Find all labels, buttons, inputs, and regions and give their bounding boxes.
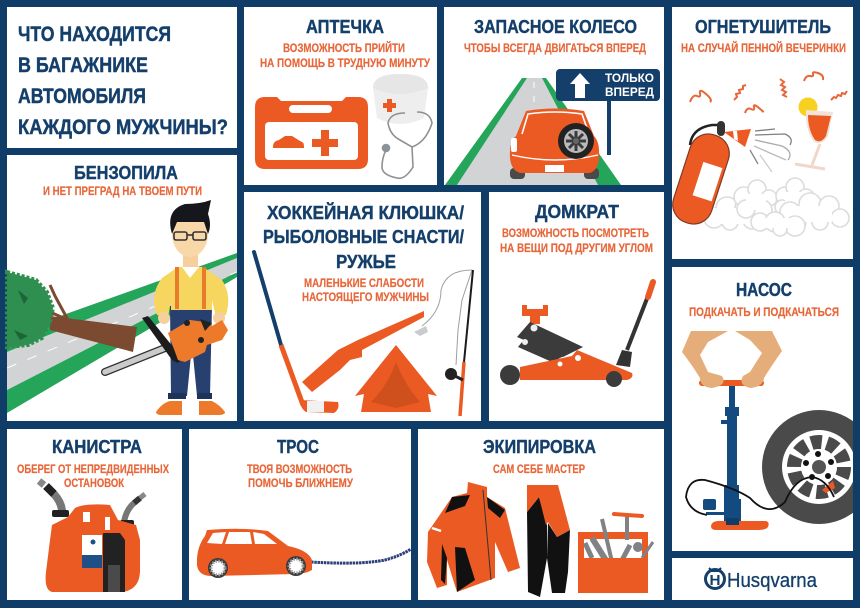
panel: logo [672, 558, 853, 600]
heading: gear: ЭКИПИРОВКА [483, 437, 596, 457]
logo: Husqvarna: H [710, 572, 720, 589]
panel: jack [489, 192, 664, 421]
subtitle: chainsaw: И НЕТ ПРЕГРАД НА ТВОЕМ ПУТИ [43, 184, 202, 198]
title: КАЖДОГО МУЖЧИНЫ? [18, 115, 228, 139]
icon: rifle [302, 311, 424, 392]
icon: car [197, 529, 312, 578]
icon: jacket [427, 482, 520, 592]
heading: hobbies: РЫБОЛОВНЫЕ СНАСТИ/ [263, 227, 464, 247]
icon: hands on pump [682, 331, 782, 388]
icon: car jack [500, 282, 653, 387]
icon: hockey stick [254, 252, 338, 413]
icon: trousers [527, 485, 570, 597]
panel: spare wheel [444, 7, 664, 185]
icon: cocktail [795, 98, 833, 169]
confetti [690, 72, 847, 113]
spray lines [750, 129, 791, 172]
hands [158, 312, 170, 324]
subtitle: tow rope: ПОМОЧЬ БЛИЖНЕМУ [248, 476, 353, 490]
subtitle: first aid kit: НА ПОМОЩЬ В ТРУДНУЮ МИНУТУ [260, 56, 430, 70]
heading: pump: НАСОС [736, 280, 792, 300]
shirt [154, 267, 228, 317]
heading: hobbies [263, 202, 464, 272]
logo: Husqvarna: Husqvarna [727, 570, 818, 592]
icon: canister [39, 481, 145, 592]
title [18, 22, 228, 139]
subtitle: jack: ВОЗМОЖНОСТЬ ПОСМОТРЕТЬ [502, 226, 649, 240]
icon: stethoscope [382, 112, 432, 178]
sign: only forward: ТОЛЬКО [605, 71, 654, 85]
icon: fire extinguisher [668, 121, 751, 229]
icon: rope [311, 549, 411, 563]
subtitle: jack: НА ВЕЩИ ПОД ДРУГИМ УГЛОМ [500, 241, 653, 255]
icon: fallen tree [7, 272, 137, 352]
panel: pump [672, 267, 860, 551]
subtitle: gear: САМ СЕБЕ МАСТЕР [493, 462, 585, 476]
subtitle: spare wheel: ЧТОБЫ ВСЕГДА ДВИГАТЬСЯ ВПЕРЕД [464, 41, 646, 55]
sign: only forward: ВПЕРЕД [605, 85, 654, 99]
subtitle: canister [17, 462, 169, 490]
title: ЧТО НАХОДИТСЯ [18, 22, 171, 46]
icon: wheel [762, 410, 860, 524]
panel: gear [418, 429, 664, 600]
chainsaw bar [105, 348, 165, 372]
panel: first aid kit [244, 7, 437, 185]
subtitle: tow rope [247, 462, 353, 490]
heading: jack: ДОМКРАТ [535, 202, 619, 222]
panel: fire extinguisher [668, 7, 853, 259]
icon: pump [686, 380, 834, 530]
subtitle: canister: ОБЕРЕГ ОТ НЕПРЕДВИДЕННЫХ [17, 462, 169, 476]
sign: only forward [556, 69, 660, 155]
panel: chainsaw [7, 155, 237, 421]
heading: tow rope: ТРОС [277, 437, 319, 457]
title: АВТОМОБИЛЯ [18, 84, 146, 108]
heading: first aid kit: АПТЕЧКА [306, 17, 384, 37]
heading: spare wheel: ЗАПАСНОЕ КОЛЕСО [474, 17, 637, 37]
heading: hobbies: РУЖЬЕ [336, 252, 396, 272]
heading: canister: КАНИСТРА [52, 437, 142, 457]
subtitle: first aid kit [260, 40, 430, 70]
road [7, 253, 237, 413]
icon: fishing rod [414, 270, 473, 416]
subtitle: jack [500, 226, 653, 255]
subtitle: hobbies: МАЛЕНЬКИЕ СЛАБОСТИ [304, 276, 424, 290]
panel: fuel canister [7, 429, 182, 600]
subtitle: tow rope: ТВОЯ ВОЗМОЖНОСТЬ [247, 462, 352, 476]
subtitle: canister: ОСТАНОВОК [64, 476, 125, 490]
road [445, 78, 621, 185]
legs [170, 306, 212, 396]
figure: man with chainsaw [105, 200, 228, 415]
heading: hobbies: ХОККЕЙНАЯ КЛЮШКА/ [267, 202, 464, 223]
panel: hockey stick, fishing tackle, rifle [244, 192, 481, 421]
panel: tow rope [189, 429, 411, 600]
icon: medical cap [373, 74, 428, 124]
foam clouds [704, 178, 849, 236]
icon: first aid case [255, 97, 368, 169]
subtitle: hobbies [302, 276, 429, 304]
icon: car with spare wheel [510, 108, 599, 179]
subtitle: hobbies: НАСТОЯЩЕГО МУЖЧИНЫ [302, 290, 429, 304]
icon: toolbox [578, 514, 653, 593]
icon: tent [355, 345, 437, 412]
chainsaw body [168, 320, 228, 362]
subtitle: first aid kit: ВОЗМОЖНОСТЬ ПРИЙТИ [283, 40, 405, 55]
heading: fire extinguisher: ОГНЕТУШИТЕЛЬ [695, 17, 831, 37]
heading: chainsaw: БЕНЗОПИЛА [74, 163, 178, 183]
title: В БАГАЖНИКЕ [18, 53, 148, 77]
chainsaw guard [142, 316, 182, 363]
neck and head [183, 252, 198, 267]
panel: title [7, 7, 237, 148]
